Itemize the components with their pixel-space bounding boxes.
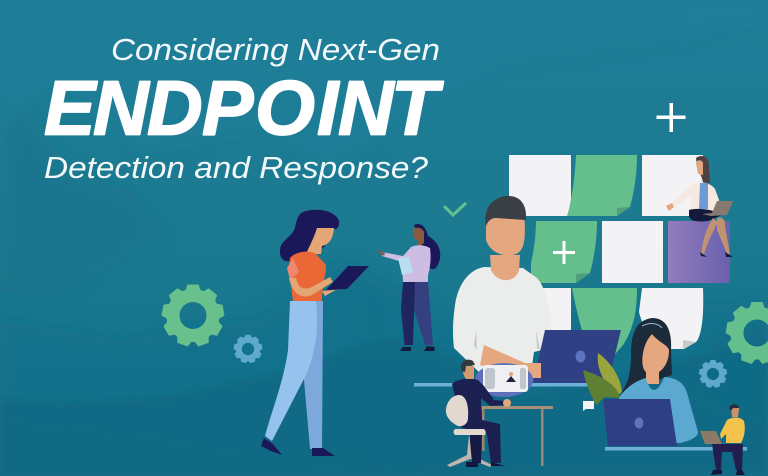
note: white row 2	[602, 221, 663, 283]
orange shirt	[289, 252, 326, 301]
desk line upper	[414, 383, 589, 386]
tablet profile card	[475, 363, 533, 397]
neck	[490, 255, 520, 280]
person: man in white sweater	[453, 196, 621, 383]
hair	[485, 196, 526, 226]
icon: plus on green note	[553, 241, 575, 264]
desk	[478, 406, 553, 409]
plant leaves	[583, 353, 622, 405]
icon: small speech bubble	[583, 401, 594, 411]
gear: green right	[725, 302, 768, 365]
title line: ENDPOINT: ENDPOINT	[44, 66, 444, 152]
blue top	[619, 377, 698, 443]
person: woman with tablet	[261, 210, 369, 462]
icon: white plus top right	[656, 103, 686, 132]
person: woman with laptop	[603, 318, 698, 446]
far trouser leg	[304, 301, 323, 449]
desk line lower	[605, 447, 747, 450]
shadow	[283, 450, 367, 462]
note: white row 3 left	[535, 288, 571, 350]
gear: blue left	[233, 335, 263, 364]
sweater	[453, 267, 552, 380]
person: woman presenting	[375, 224, 440, 351]
note: purple row 2	[668, 221, 730, 283]
near trouser leg	[265, 301, 317, 441]
hair	[280, 210, 339, 261]
icon: green check	[444, 203, 466, 215]
note: white row 1 left	[509, 155, 571, 216]
head	[463, 366, 474, 379]
face and neck	[642, 334, 669, 384]
laptop blue	[533, 330, 621, 383]
person: woman sitting on note with laptop	[666, 156, 733, 257]
shoes	[261, 438, 335, 456]
note: white row 3 right	[639, 288, 703, 349]
title line: Considering Next-Gen: Considering Next-Gen	[111, 32, 440, 67]
note: green row 2	[531, 221, 597, 283]
forearm	[480, 345, 541, 378]
face	[486, 212, 525, 255]
arm	[289, 277, 333, 296]
note: green row 3	[572, 288, 637, 360]
laptop	[603, 399, 677, 446]
note: green row 1	[567, 155, 637, 216]
hair	[621, 318, 672, 393]
sticky note wall	[509, 155, 730, 360]
gear: blue right	[699, 360, 727, 388]
person: man in yellow with laptop	[700, 404, 745, 475]
tablet	[326, 266, 369, 290]
chair base	[447, 435, 492, 467]
note: white row 1 right	[642, 155, 703, 216]
body and legs	[452, 379, 505, 463]
title	[44, 32, 444, 185]
title line: Detection and Response?: Detection and Response?	[44, 150, 429, 185]
gear: green left	[161, 284, 225, 347]
chair seat and back	[454, 429, 486, 435]
face	[306, 228, 334, 254]
person: man at desk	[446, 360, 553, 467]
